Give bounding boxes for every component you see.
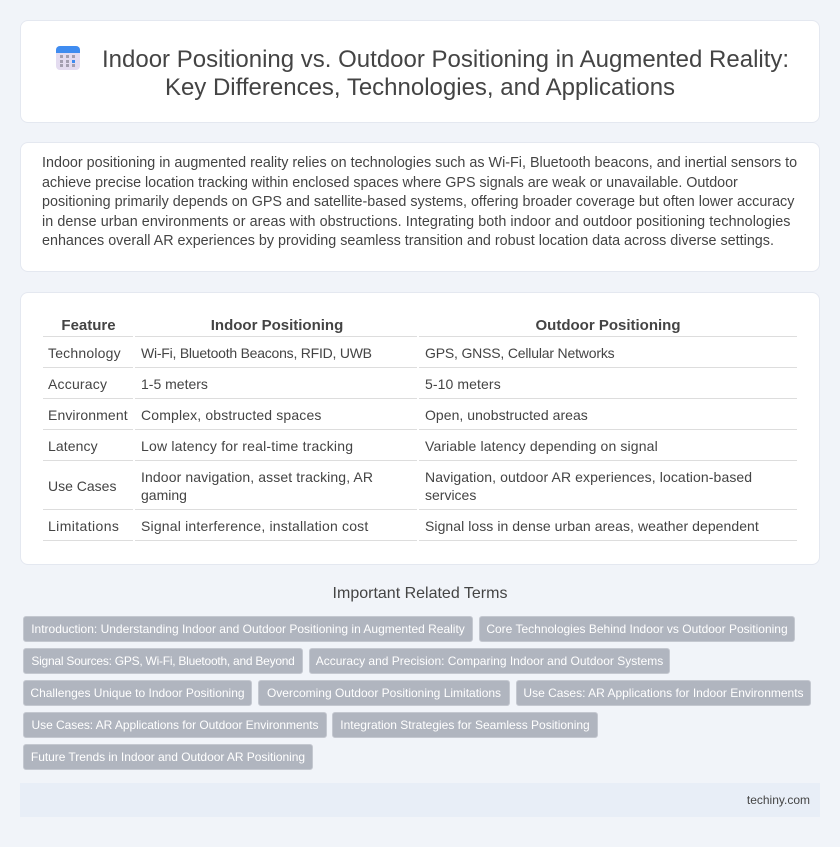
related term tags: Accuracy and Precision: Comparing Indoor and Outdoor Systems xyxy=(316,654,663,668)
table rows: Low latency for real-time tracking xyxy=(141,438,353,454)
related term tags: Core Technologies Behind Indoor vs Outdoor Positioning xyxy=(486,622,788,636)
table rows: Navigation, outdoor AR experiences, location-based xyxy=(425,469,752,485)
table rows: Indoor navigation, asset tracking, AR xyxy=(141,469,373,485)
related term tags: Signal Sources: GPS, Wi-Fi, Bluetooth, and Beyond xyxy=(31,654,295,668)
related term tags: Challenges Unique to Indoor Positioning xyxy=(30,686,245,700)
table rows: Variable latency depending on signal xyxy=(425,438,658,454)
intro paragraph: positioning primarily depends on GPS and satellite-based systems, offering broader coverage but often lower accuracy xyxy=(42,194,794,210)
table rows: services xyxy=(425,487,476,503)
related term tags: Use Cases: AR Applications for Outdoor Environments xyxy=(32,718,318,732)
table rows: gaming xyxy=(141,487,187,503)
table rows xyxy=(43,336,797,541)
table rows: 5-10 meters xyxy=(425,376,501,392)
related term tags: Overcoming Outdoor Positioning Limitations xyxy=(267,686,501,700)
table rows: Open, unobstructed areas xyxy=(425,407,588,423)
table rows: Wi-Fi, Bluetooth Beacons, RFID, UWB xyxy=(141,345,372,361)
table rows: Signal loss in dense urban areas, weather dependent xyxy=(425,518,759,534)
table rows: Complex, obstructed spaces xyxy=(141,407,322,423)
table header: Outdoor Positioning xyxy=(536,317,680,334)
table rows: GPS, GNSS, Cellular Networks xyxy=(425,345,614,361)
table rows: 1-5 meters xyxy=(141,376,208,392)
table rows: Limitations xyxy=(48,518,119,534)
table rows: Accuracy xyxy=(48,376,107,392)
intro paragraph: in dense urban environments or areas with obstructions. Integrating both indoor and outdoor positioning technologies xyxy=(42,214,791,230)
header panel xyxy=(20,20,820,123)
table header xyxy=(61,317,680,334)
table rows: Use Cases xyxy=(48,478,116,494)
footer site name: techiny.com xyxy=(747,793,810,807)
intro paragraph: Indoor positioning in augmented reality relies on technologies such as Wi-Fi, Bluetooth beacons, and inertial sensors to xyxy=(42,155,797,171)
table rows: Signal interference, installation cost xyxy=(141,518,368,534)
related term tags xyxy=(23,616,811,770)
title: Indoor Positioning vs. Outdoor Positioning in Augmented Reality: xyxy=(102,46,789,73)
table rows: Environment xyxy=(48,407,128,423)
related term tags: Future Trends in Indoor and Outdoor AR Positioning xyxy=(31,750,305,764)
intro paragraph xyxy=(42,155,797,249)
title: Key Differences, Technologies, and Applications xyxy=(165,74,675,101)
table header: Feature xyxy=(61,317,116,334)
title xyxy=(102,46,789,101)
comparison table panel xyxy=(20,292,820,565)
related term tags: Use Cases: AR Applications for Indoor Environments xyxy=(523,686,804,700)
footer bar xyxy=(20,783,820,817)
related term tags: Introduction: Understanding Indoor and Outdoor Positioning in Augmented Reality xyxy=(31,622,465,636)
related term tags: Integration Strategies for Seamless Positioning xyxy=(340,718,590,732)
intro paragraph: achieve precise location tracking within enclosed spaces where GPS signals are weak or unavailable. Outdoor xyxy=(42,175,738,191)
related terms heading: Important Related Terms xyxy=(333,585,507,602)
intro paragraph: enhances overall AR experiences by providing seamless transition and robust location data across diverse settings. xyxy=(42,233,774,249)
intro text panel xyxy=(20,142,820,272)
table rows: Technology xyxy=(48,345,121,361)
icon: calendar grid xyxy=(56,46,80,70)
table rows: Latency xyxy=(48,438,98,454)
table header: Indoor Positioning xyxy=(211,317,343,334)
